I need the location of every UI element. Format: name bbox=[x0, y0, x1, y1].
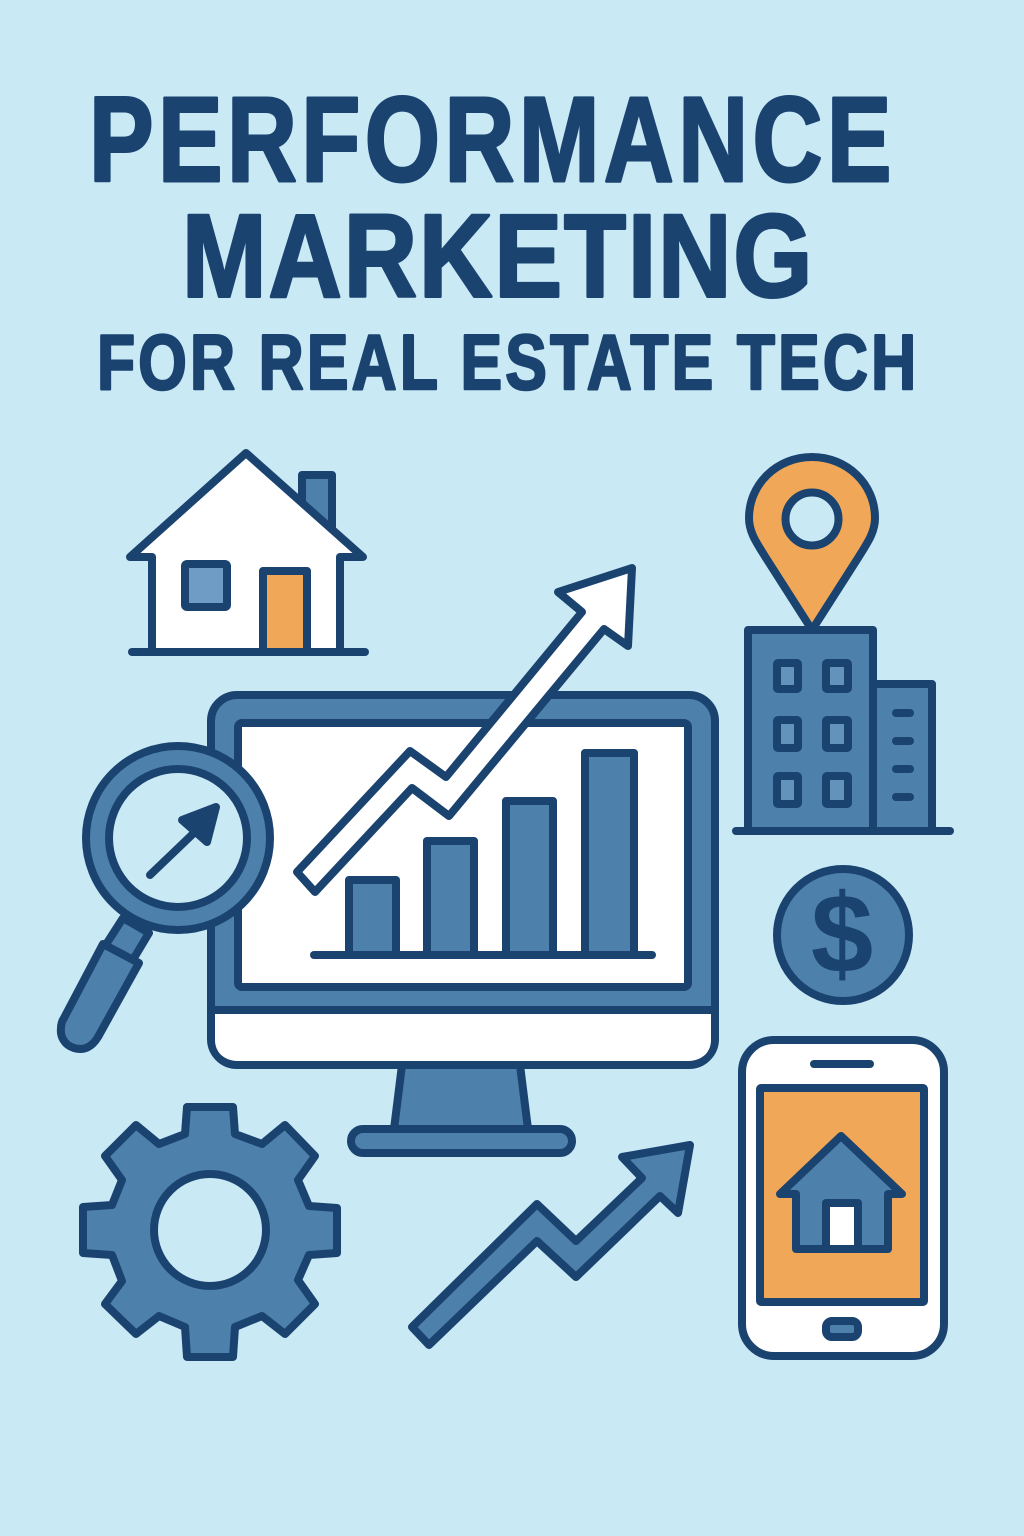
icon: office buildings bbox=[736, 630, 950, 831]
title: PERFORMANCE bbox=[89, 73, 891, 208]
icon: gear bbox=[83, 1107, 337, 1357]
icon: smartphone bbox=[742, 1040, 944, 1356]
icon: phone house bbox=[780, 1136, 902, 1249]
arrow: lower growth bbox=[412, 1145, 690, 1345]
monitor bbox=[211, 695, 715, 1065]
title: FOR REAL ESTATE TECH bbox=[97, 318, 916, 406]
growth arrow on chart bbox=[297, 568, 632, 892]
icon: magnifying glass bbox=[61, 746, 270, 1049]
title: MARKETING bbox=[182, 190, 812, 322]
icon: dollar coin bbox=[777, 869, 909, 1001]
title bbox=[89, 73, 916, 406]
icon: house bbox=[130, 453, 365, 652]
bar chart bbox=[314, 753, 652, 955]
icon: dollar coin: $ bbox=[811, 871, 873, 996]
monitor stand bbox=[351, 1065, 572, 1153]
icon: location pin bbox=[749, 457, 875, 630]
